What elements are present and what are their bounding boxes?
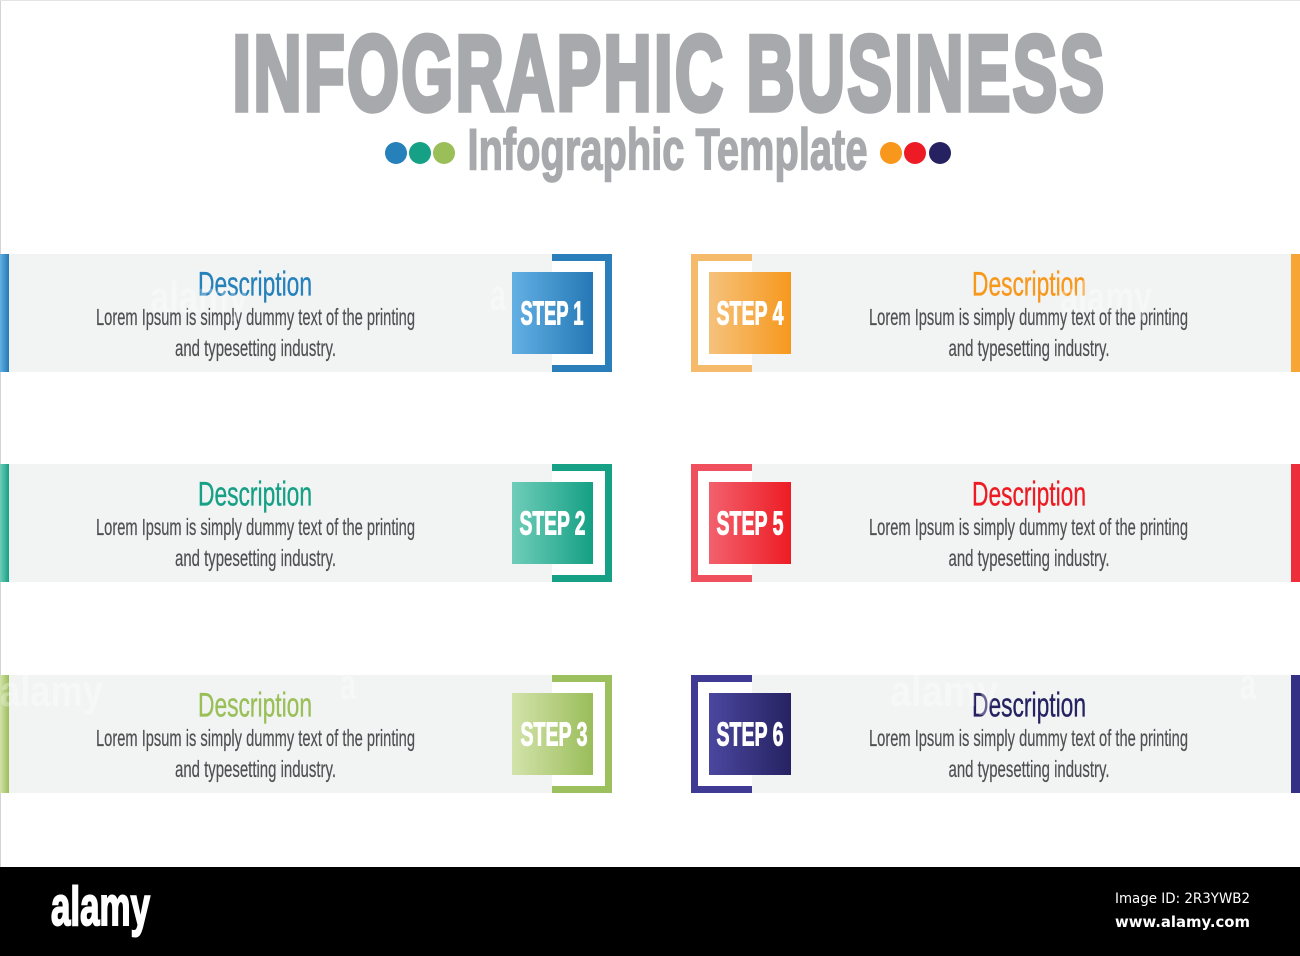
subtitle row	[385, 118, 951, 182]
description text	[96, 476, 415, 571]
panel: step 1: a	[490, 271, 506, 320]
right coloured dots	[880, 142, 951, 164]
description text: Description	[972, 266, 1086, 304]
alamy logo: alamy	[51, 875, 150, 937]
panel: step 3: a	[340, 660, 356, 709]
step badge	[512, 272, 593, 354]
description text: Description	[198, 266, 312, 304]
panel: step 6	[691, 660, 1300, 793]
panel: step 3	[0, 660, 612, 793]
panel: step 3: alamy	[0, 667, 103, 716]
step badge	[709, 272, 791, 354]
step badge	[709, 482, 791, 564]
panel: step 4	[691, 254, 1300, 372]
description text: Lorem Ipsum is simply dummy text of the printing	[96, 725, 415, 751]
step badge	[512, 693, 593, 775]
description text: and typesetting industry.	[175, 335, 336, 361]
description text: and typesetting industry.	[175, 545, 336, 571]
panel: step 4: alamy	[1060, 273, 1152, 322]
description text: and typesetting industry.	[175, 756, 336, 782]
step badge: STEP 5	[716, 504, 784, 542]
bracket	[552, 464, 612, 582]
bracket	[552, 254, 612, 372]
description text	[869, 476, 1188, 571]
description text	[96, 686, 415, 782]
bracket	[552, 675, 612, 793]
description text	[869, 266, 1188, 361]
bracket	[691, 464, 752, 582]
footer bar	[0, 867, 1300, 956]
panel: step 6: alamy	[890, 667, 998, 716]
step badge: STEP 3	[520, 716, 588, 752]
step badge	[709, 693, 791, 775]
description text: Description	[198, 476, 312, 514]
panel: step 2	[0, 464, 612, 582]
description text: Description	[972, 686, 1086, 724]
description text: Description	[972, 476, 1086, 514]
description text: and typesetting industry.	[948, 756, 1110, 782]
panel: step 1: alamy	[150, 273, 248, 322]
panel: step 1	[0, 254, 612, 372]
bracket	[691, 675, 752, 793]
panel: step 6: a	[1240, 660, 1256, 709]
left coloured dots	[385, 142, 455, 164]
bracket	[691, 254, 752, 372]
step badge: STEP 6	[716, 716, 784, 752]
description text: Lorem Ipsum is simply dummy text of the printing	[96, 304, 415, 330]
step badge: STEP 4	[716, 294, 784, 332]
subtitle: Infographic Template	[468, 118, 868, 182]
website: www.alamy.com	[1115, 913, 1250, 931]
image id: Image ID: 2R3YWB2	[1115, 891, 1250, 907]
description text	[96, 266, 415, 361]
description text	[869, 686, 1188, 782]
description text: Lorem Ipsum is simply dummy text of the printing	[96, 514, 415, 540]
step badge	[512, 482, 593, 564]
description text: and typesetting industry.	[948, 545, 1110, 571]
step badge: STEP 1	[520, 294, 584, 332]
description text: and typesetting industry.	[948, 335, 1110, 361]
panel: step 5	[691, 464, 1300, 582]
description text: Description	[198, 686, 312, 724]
step badge: STEP 2	[520, 504, 586, 542]
